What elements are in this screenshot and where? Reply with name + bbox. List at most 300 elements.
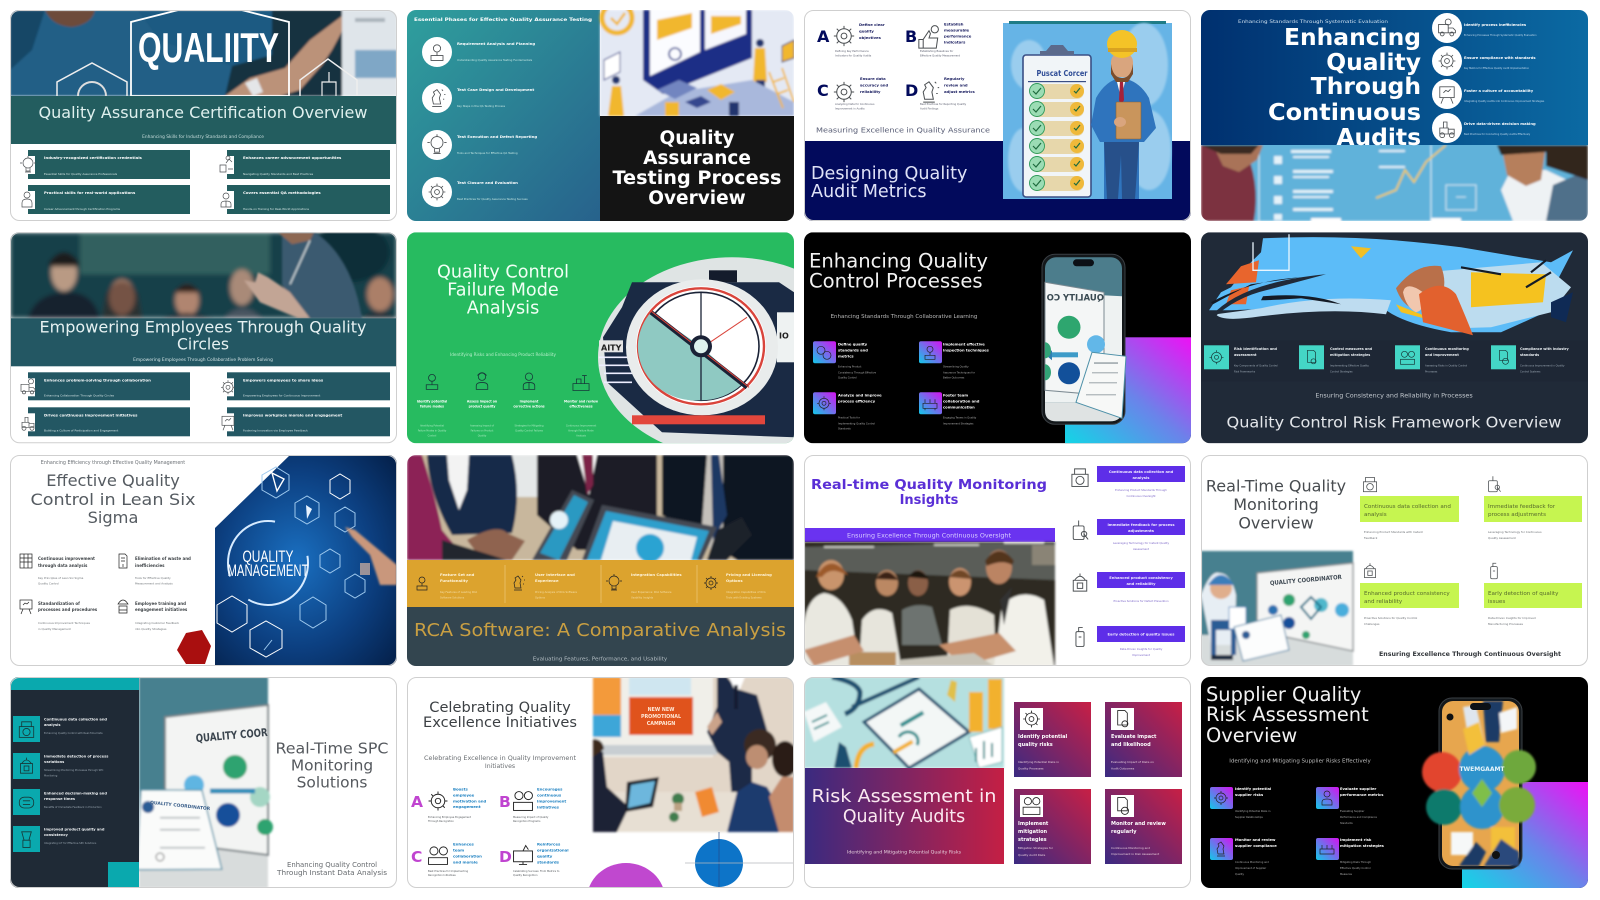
ABCD metric items: quality [859, 28, 874, 34]
four benefits [1360, 476, 1582, 626]
item boxes [21, 372, 390, 436]
item boxes: Industry-recognized certification credentials [44, 155, 143, 160]
items: Consistency Through Effective [838, 370, 876, 374]
items: Define quality [838, 342, 868, 346]
four steps: effectiveness [569, 404, 593, 408]
title: Quality Audits [843, 807, 965, 827]
items: Implementing Quality Control [838, 421, 875, 425]
card 15: Risk Assessment in Quality Audits [804, 677, 1191, 888]
items: Streamlining Monitoring Processes through SPC [44, 768, 104, 772]
items: Engaging Teams in Quality [943, 415, 977, 419]
ABCD items: motivation and [453, 798, 486, 804]
items: Elimination of waste and [135, 556, 191, 561]
item boxes: Enhances problem-solving through collaboration [44, 377, 151, 382]
dark left panel [10, 677, 139, 888]
four features: Tools with Existing Systems [726, 596, 762, 600]
campaign sign text: CAMPAIGN [647, 721, 675, 727]
title [1206, 683, 1369, 747]
four steps: Identifying Potential [420, 424, 444, 427]
risk step tiles: Improvement in Risk Assessment [1111, 852, 1160, 856]
items: inefficiencies [135, 563, 165, 568]
subtitle: Identifying Risks and Enhancing Product Reliability [450, 352, 557, 357]
ABCD items: A [411, 793, 423, 811]
four steps: Quality Control Failures [515, 429, 544, 432]
subtitle: Through Instant Data Analysis [276, 869, 387, 877]
subtitle: Ensuring Consistency and Reliability in Processes [1315, 391, 1473, 399]
panel heading: Essential Phases for Effective Quality Assurance Testing [414, 17, 592, 23]
title: Supplier Quality [1206, 683, 1361, 706]
four benefits: Data-Driven Insights for Improved [1488, 616, 1536, 620]
title: Effective Quality [46, 471, 180, 490]
ABCD items: quality [537, 854, 553, 858]
four framework items: Key Components of Quality Control [1234, 363, 1278, 367]
items: processes and procedures [38, 607, 98, 612]
office photo [1201, 140, 1588, 221]
ABCD items: Measuring Impact of Quality [513, 815, 549, 819]
subtitle: Enhancing Standards Through Collaborative Learning [831, 314, 977, 320]
title: Overview [1206, 724, 1297, 747]
items: Improvement of Supplier [1235, 866, 1267, 870]
four features: User Experience: RCA Software [631, 590, 672, 594]
items: response times [44, 797, 75, 801]
title: Circles [177, 335, 229, 353]
phone mockup: TWEMGAAMT [1459, 766, 1505, 773]
items: Analyze and improve [838, 393, 882, 397]
items: Standards [838, 426, 851, 430]
photo: quality hexagons and hands [10, 10, 396, 96]
items: Benefits of Immediate Feedback in Production [44, 805, 102, 809]
subtitle: Measuring Excellence in Quality Assurance [816, 126, 990, 134]
four benefits: Feedback [1364, 536, 1378, 540]
items: supplier compliance [1235, 844, 1277, 848]
four features: Software Solutions [440, 596, 465, 600]
four features [417, 565, 772, 603]
items: Identify potential [1235, 787, 1271, 791]
item boxes: Improves workplace morale and engagement [243, 412, 342, 417]
ABCD items: organizational [537, 848, 569, 852]
coordinator photo [1201, 551, 1353, 666]
subtitle: Ensuring Excellence Through Continuous Oversight [847, 532, 1011, 540]
title: Insights [900, 493, 959, 508]
ABCD metric items: Ensure data [860, 76, 886, 81]
risk step tiles: Quality Audit Risks [1018, 853, 1046, 857]
ABCD items: D [499, 848, 512, 866]
four steps: Assessing Impact of [470, 424, 494, 427]
lab team photo [804, 542, 1055, 666]
items: Quality [1235, 872, 1244, 876]
risk step tiles: quality risks [1018, 742, 1053, 748]
ABCD metric items: Effective Quality Measurement [920, 54, 960, 58]
title: Quality Control [437, 262, 569, 282]
risk step tiles: Identify potential [1018, 734, 1068, 740]
four phases: Test Execution and Defect Reporting [457, 134, 537, 139]
card 12: Real-Time Quality Monitoring Overview: QUALITY COORDINATOR [1270, 574, 1342, 587]
title: Real-Time SPC [276, 740, 388, 758]
item boxes: Enhancing Collaboration Through Quality Circles [44, 393, 115, 397]
title: Quality Control Risk Framework Overview [1226, 413, 1562, 431]
title: Assurance [643, 148, 751, 169]
isometric testing illustration [600, 3, 794, 116]
four steps: Monitor and review [564, 399, 598, 403]
black title panel [600, 116, 794, 221]
four framework items: and improvement [1425, 353, 1459, 357]
items: supplier risks [1235, 793, 1264, 797]
title [276, 740, 388, 792]
items [1210, 787, 1385, 876]
navy title panel [804, 141, 1191, 221]
quality management image [215, 455, 397, 666]
teal accents [10, 677, 139, 888]
ABCD items: Through Recognition [428, 819, 454, 823]
items: Practical Tools for [838, 415, 861, 419]
items: in Quality Management [38, 627, 72, 631]
items: Quality Control [38, 582, 59, 586]
four features: Integration Capabilities of RCA [726, 590, 766, 594]
items: Enhancing Quality Control with Real-Time Data [44, 731, 103, 735]
item boxes: Career Advancement through Certification Programs [44, 207, 121, 211]
items: Monitoring [44, 774, 58, 778]
subtitle: Enhancing Skills for Industry Standards and Compliance [142, 134, 264, 140]
items: Implement risk [1340, 838, 1372, 842]
title: Sigma [88, 508, 138, 527]
items: Quality Control [838, 375, 857, 379]
title: Continuous [1268, 98, 1421, 126]
items: analysis [44, 723, 60, 727]
title band [10, 96, 397, 144]
title: Designing Quality [811, 164, 967, 184]
items: inspection techniques [943, 348, 990, 352]
risk step tiles: strategies [1018, 837, 1047, 843]
card 10: RCA Software: A Comparative Analysis [407, 455, 794, 666]
risk step tiles: Continuous Monitoring and [1111, 846, 1150, 850]
title [30, 471, 196, 527]
ABCD items: employee [453, 792, 475, 798]
photo: team with laptops [407, 455, 794, 562]
audit items: Drive data-driven decision making [1464, 122, 1536, 126]
monitoring items: Immediate feedback for process [1107, 523, 1175, 527]
four steps: Assess impact on [467, 399, 497, 403]
gradient block [1462, 782, 1588, 888]
decorative circles [587, 832, 794, 900]
four steps: Implement [520, 399, 539, 403]
ABCD items: improvement [537, 798, 566, 804]
ABCD items: B [499, 793, 511, 811]
four features: Usability Insights [631, 596, 654, 600]
ABCD items: collaboration [453, 854, 482, 858]
item boxes: Empowering Employees for Continuous Improvement [243, 393, 321, 397]
card 1: Quality Assurance Certification Overview [10, 2, 397, 221]
four benefits: Early detection of quality [1488, 591, 1559, 597]
items: into Quality Strategies [135, 627, 167, 631]
title [1206, 476, 1346, 532]
audit items: Enhancing Processes Through Systematic Quality Evaluation [1464, 34, 1537, 37]
isometric audit illustration [804, 677, 1004, 768]
four framework items: Control measures and [1330, 347, 1373, 351]
ABCD items: team [453, 848, 464, 852]
item boxes [20, 150, 390, 214]
items: communication [943, 405, 975, 409]
ABCD items: engagement [453, 804, 481, 809]
title: Quality Assurance Certification Overview [38, 103, 368, 122]
risk step tiles: Monitor and review [1111, 821, 1166, 827]
monitoring items: Assessment [1133, 547, 1149, 551]
items: Improvement Strategies [943, 421, 974, 425]
title [612, 128, 782, 209]
title [41, 320, 366, 350]
items: Performance and Compliance [1340, 815, 1377, 819]
ABCD metric items [817, 22, 975, 110]
four framework items: assessment [1234, 353, 1257, 357]
footer statement: Ensuring Excellence Through Continuous Oversight [1379, 651, 1561, 658]
audit items: Best Practices for Conducting Quality Audits Effectively [1464, 133, 1531, 136]
ABCD metric items: indicators [944, 40, 966, 44]
items: Foster team [943, 393, 968, 397]
card 14: Celebrating Quality Excellence Initiatives [407, 677, 798, 900]
items: Supplier Relationships [1235, 815, 1263, 819]
photo: quality hexagons and hands: QUALIITY [138, 24, 279, 71]
four features: Key Features of Leading RCA [440, 590, 477, 594]
title: Quality [660, 128, 734, 149]
four benefits: analysis [1364, 512, 1387, 518]
item boxes: Hands-on Training for Real-World Applications [243, 207, 309, 211]
ABCD metric items: accuracy and [860, 82, 889, 88]
items: Identifying Potential Risks in [1235, 809, 1271, 813]
four steps: failure modes [420, 404, 444, 408]
gauge illustration: IO [779, 331, 789, 340]
risk step tiles: Quality Processes [1018, 766, 1044, 770]
card 6: Quality Control Failure Mode Analysis [407, 232, 794, 444]
ABCD metric items: A [817, 27, 830, 46]
ABCD metric items: Establish [944, 22, 964, 26]
audit items: Integrating Quality Audits into Continuous Improvement Strategies [1464, 100, 1545, 103]
title: Control in Lean Six [30, 490, 196, 509]
title: Celebrating Quality [429, 699, 571, 716]
ABCD metric items: D [905, 81, 918, 100]
items: Standardization of [38, 601, 80, 606]
item boxes: Enhances career advancement opportunities [243, 155, 342, 160]
title [437, 262, 569, 318]
four steps: through Failure Mode [568, 429, 594, 432]
monitoring items: Enhancing Product Standards Through [1115, 488, 1167, 492]
item boxes: Practical skills for real-world applications [44, 190, 136, 195]
subtitle: Identifying and Mitigating Supplier Risks Effectively [1229, 758, 1372, 764]
certificate board photo [137, 677, 273, 888]
ABCD items: Boosts [453, 786, 468, 792]
title: Enhancing [1284, 23, 1421, 51]
items: variations [44, 760, 64, 764]
four steps: Failures on Product [471, 429, 493, 432]
four features: Experience [535, 578, 559, 583]
four benefits: issues [1488, 599, 1505, 605]
items: Integrating Customer Feedback [135, 621, 180, 625]
ABCD items [411, 786, 569, 877]
title: Risk Assessment [1206, 703, 1369, 726]
monitoring items: Continuous data collection and [1109, 470, 1174, 474]
subtitle: Identifying and Mitigating Potential Quality Risks [847, 850, 962, 856]
title [811, 478, 1047, 508]
items: consistency [44, 833, 69, 837]
items: Implement effective [943, 342, 985, 346]
items: Continuous Improvement Techniques [38, 621, 90, 625]
ABCD metric items: Define clear [859, 22, 885, 27]
card 4: Enhancing Quality Through Continuous Audits [1201, 10, 1588, 221]
ABCD items: Enhancing Employee Engagement [428, 815, 471, 819]
ABCD items: standards [537, 860, 560, 864]
items: Measurement and Analysis [135, 582, 173, 586]
subtitle [424, 755, 577, 770]
ABCD metric items: C [817, 81, 829, 100]
ABCD metric items: adjust metrics [944, 89, 975, 94]
title band [10, 318, 397, 366]
card 5: Empowering Employees Through Quality Circles [10, 222, 397, 443]
ABCD metric items: B [905, 27, 917, 46]
items: Better Outcomes [943, 375, 965, 379]
meeting photo [593, 677, 798, 832]
ABCD items: continuous [537, 792, 562, 798]
four steps: Identify potential [417, 399, 447, 403]
title: Real-time Quality Monitoring [811, 478, 1047, 493]
four phases: Test Closure and Evaluation [457, 180, 518, 185]
four benefits: Leveraging Technology for Continuous [1488, 530, 1542, 534]
items: Streamlining Quality [943, 364, 969, 368]
quality management image: MANAGEMENT [228, 561, 308, 580]
four benefits: Challenges [1364, 622, 1380, 626]
four framework items: Risk Frameworks [1234, 369, 1256, 373]
card 3: Designing Quality Audit Metrics: Audit Metrics [811, 182, 927, 202]
items: metrics [838, 354, 854, 358]
four framework items: Compliance with industry [1520, 347, 1570, 351]
items: Tools for Effective Quality [134, 576, 171, 580]
gradient title panel [804, 768, 1004, 864]
item boxes: Empowers employees to share ideas [243, 377, 324, 382]
four benefits: Quality Assessment [1488, 536, 1517, 540]
risk step tiles: Evaluate impact [1111, 734, 1157, 740]
monitoring items: analysis [1133, 476, 1150, 480]
ABCD metric items: objectives [859, 35, 882, 40]
monitoring items: Improvement [1132, 653, 1150, 657]
four phases: Understanding Quality Assurance Testing Fundamentals [457, 58, 533, 62]
four phases [422, 37, 537, 207]
items: Measures [1340, 872, 1353, 876]
title: Overview [648, 188, 746, 209]
subtitle: Initiatives [485, 763, 515, 770]
risk step tiles: Identifying Potential Risks in [1018, 760, 1059, 764]
ABCD items: and morale [453, 860, 478, 864]
items: collaboration and [943, 399, 980, 403]
four features: Feature Set and [440, 572, 475, 577]
title: Monitoring [1233, 495, 1319, 514]
four benefits: Proactive Solutions for Quality Control [1364, 616, 1418, 620]
card 16: Supplier Quality Risk Assessment Overview [1201, 677, 1588, 888]
four benefits: Manufacturing Processes [1488, 622, 1523, 626]
monitoring items: Data-Driven Insights for Quality [1120, 647, 1163, 651]
item boxes: Fostering Innovation via Employee Feedback [243, 428, 308, 432]
clipboard checklist [1023, 45, 1091, 197]
four features: Functionality [440, 578, 468, 583]
items: Continuous data collection and [44, 718, 107, 722]
title: Empowering Employees Through Quality [40, 318, 366, 336]
items [13, 716, 108, 852]
items: Evaluating Supplier [1340, 809, 1365, 813]
ABCD items: Recognition Programs [513, 819, 541, 823]
four steps: Analysis [576, 434, 587, 437]
four framework items: Processes [1425, 369, 1438, 373]
ABCD metric items: Establishing Baselines for [920, 49, 954, 53]
card 9: Effective Quality Control in Lean Six Sigma [10, 455, 397, 666]
gauge illustration [598, 257, 794, 444]
four features: User Interface and [535, 572, 575, 577]
auditor figure [1091, 30, 1156, 199]
four steps: Failure Modes in Quality [418, 429, 447, 432]
purple subtitle band [804, 528, 1055, 542]
ABCD items: C [411, 848, 422, 866]
card 13: Real-Time SPC Monitoring Solutions: QUALITY COOR [195, 726, 269, 745]
four framework items: Continuous monitoring [1425, 347, 1469, 351]
four steps: Quality [478, 434, 487, 437]
monitoring items: Continuous Oversight [1126, 494, 1156, 498]
risk step tiles: Audit Outcomes [1111, 766, 1135, 770]
ABCD metric items: Best Practices for Reporting Quality [920, 102, 967, 106]
card 7: Enhancing Quality Control Processes [804, 232, 1191, 443]
item boxes: Essential Skills for Quality Assurance Professionals [44, 172, 118, 176]
ABCD metric items: performance [944, 34, 972, 38]
four phases: Test Case Design and Development [457, 87, 534, 92]
four framework items: Risk identification and [1234, 347, 1278, 351]
ABCD items: Reinforces [537, 842, 561, 846]
audit items [1432, 13, 1545, 143]
audit items: Key Metrics for Effective Quality Audit Implementation [1464, 67, 1530, 70]
items [813, 341, 990, 430]
ABCD metric items: Defining Key Performance [835, 49, 869, 53]
risk step tiles: Implement [1018, 821, 1049, 827]
item boxes: Building a Culture of Participation and Engagement [44, 428, 119, 432]
title: Overview [1238, 514, 1314, 532]
four steps [417, 373, 598, 437]
items [20, 554, 191, 631]
four steps: product quality [469, 404, 495, 408]
audit items: Identify process inefficiencies [1464, 23, 1527, 27]
ABCD metric items: Indicators for Quality Audits [835, 54, 872, 58]
four framework items: standards [1520, 353, 1539, 357]
title [812, 787, 996, 827]
four features: Pricing Analysis of RCA Software [535, 590, 577, 594]
subtitle: Empowering Employees Through Collaborative Problem Solving [133, 357, 273, 363]
ABCD metric items: Analyzing Data for Continuous [835, 102, 875, 106]
ABCD items: initiatives [537, 804, 560, 810]
ABCD items: Recognition Initiatives [428, 873, 456, 877]
title: Solutions [297, 774, 367, 792]
item band [1201, 340, 1588, 381]
four benefits: Continuous data collection and [1364, 504, 1451, 510]
four benefits: process adjustments [1488, 512, 1546, 518]
monitoring items: Proactive Solutions for Defect Prevention [1113, 599, 1169, 603]
item boxes: Covers essential QA methodologies [243, 190, 321, 195]
ABCD items: Celebrating Success: From Metrics to [513, 869, 560, 873]
monitoring items: Enhanced product consistency [1109, 576, 1173, 580]
items: Continuous improvement [38, 556, 95, 561]
campaign sign text: PROMOTIONAL [641, 714, 681, 720]
four phases: Tools and Techniques for Effective QA Testing [456, 151, 518, 155]
items: Key Principles of Lean Six Sigma [38, 576, 84, 580]
title: Enhancing Quality [809, 249, 988, 272]
risk step tiles [1014, 702, 1182, 864]
teal panel [407, 10, 600, 221]
items: Enhancing Product [838, 364, 861, 368]
items: Assurance Techniques for [943, 370, 976, 374]
four features: Pricing and Licensing [726, 572, 772, 577]
items: Standards [1340, 821, 1353, 825]
four framework items: Control Systems [1520, 369, 1541, 373]
